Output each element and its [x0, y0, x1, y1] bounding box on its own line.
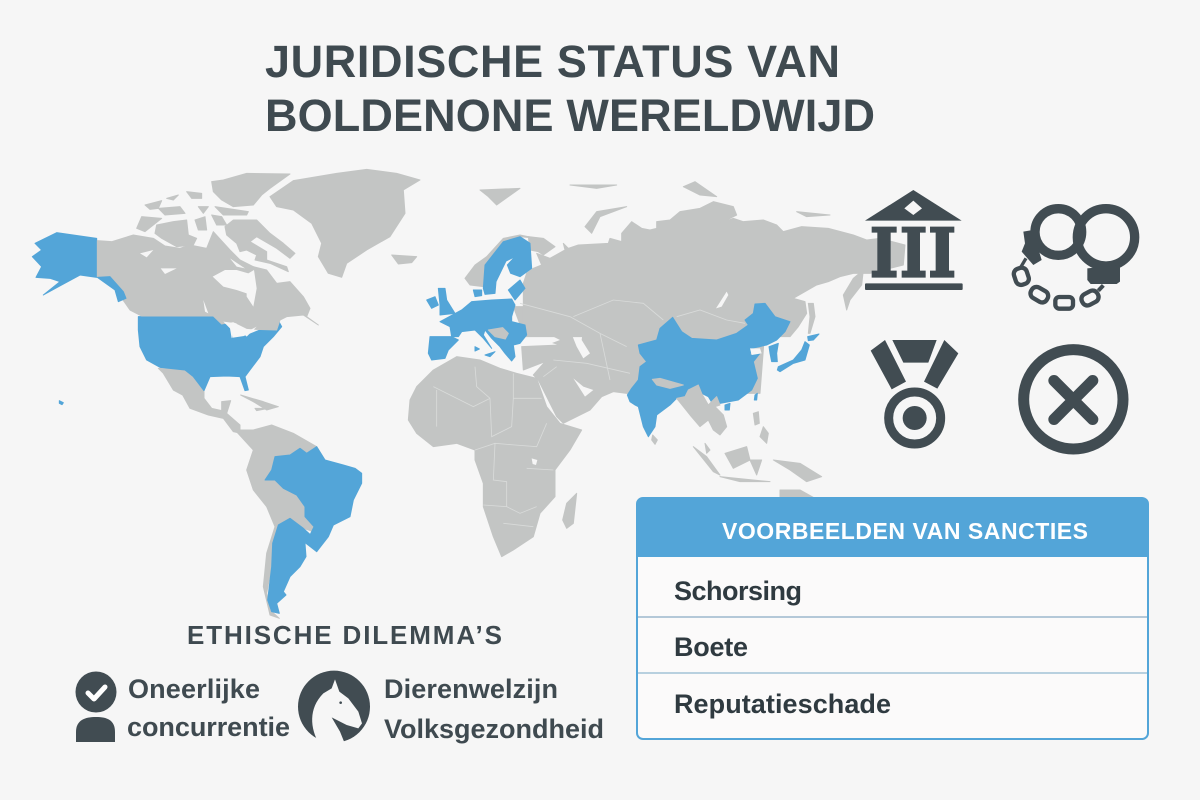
title: [265, 36, 875, 141]
header text: VOORBEELDEN VAN SANCTIES: [722, 518, 1088, 544]
map: Africa and southern Asia: [408, 182, 830, 557]
Southeast Asia: [677, 385, 727, 435]
Indonesia and Philippines: [693, 443, 822, 498]
icon: person with check: [76, 672, 116, 742]
heading: ethische dilemma's: ETHISCHE DILEMMA’S: [187, 620, 502, 650]
Africa: [408, 357, 582, 557]
Iceland: [392, 255, 417, 264]
Argentina: [268, 518, 311, 613]
Madagascar: [563, 493, 577, 528]
map: China, India, Japan: [627, 303, 819, 444]
Brazil: [265, 447, 362, 552]
panel: voorbeelden van sancties: [637, 498, 1148, 739]
UK and Ireland: [427, 288, 455, 315]
Spain and Portugal: [428, 337, 458, 360]
Baltics, Denmark and islands: [473, 280, 525, 357]
title: JURIDISCHE STATUS VAN: [265, 36, 840, 87]
icon: horse: [298, 671, 370, 744]
panel header: [637, 498, 1148, 557]
Norway: [465, 235, 537, 287]
map: Russia: [523, 202, 905, 337]
Bohai Sea: [750, 348, 762, 355]
text: oneerlijke concurrentie: [127, 674, 290, 742]
Kola peninsula: [528, 237, 555, 255]
Lake Baikal: [716, 292, 728, 308]
icon: cross in circle: [1024, 350, 1123, 449]
row: Schorsing: Schorsing: [674, 576, 802, 606]
map: Greenland, Iceland, Latin America, USA: [32, 169, 420, 618]
Himalaya gap: [652, 378, 683, 388]
Greenland: [270, 169, 420, 277]
text: oneerlijke concurrentie: Oneerlijke: [128, 674, 260, 704]
text: oneerlijke concurrentie: concurrentie: [127, 712, 290, 742]
Continental EU: [440, 299, 527, 361]
Arctic islands: [137, 173, 290, 247]
South America: [235, 425, 333, 618]
Hudson Bay and lakes: [140, 250, 257, 338]
Canada mainland: [97, 232, 318, 330]
Baffin Island: [225, 220, 295, 272]
row dividers: [638, 616, 1147, 618]
Sweden and Finland: [483, 237, 532, 294]
text: dierenwelzijn volksgezondheid: Volksgezondheid: [384, 714, 604, 744]
Russia mainland: [523, 202, 905, 337]
row: Boete: Boete: [674, 632, 748, 662]
Black Sea, Caspian, Persian Gulf and Lake Victoria: [523, 327, 593, 465]
Japan: [777, 334, 819, 372]
map: Canada: [97, 173, 318, 338]
panel body: [637, 498, 1148, 739]
Korea: [769, 343, 778, 362]
China and India: [627, 303, 790, 437]
world map: [32, 169, 905, 618]
icon: courthouse: [865, 190, 963, 290]
text: dierenwelzijn volksgezondheid: Dierenwelzijn: [384, 674, 558, 704]
Balkans: [488, 328, 508, 339]
text: dierenwelzijn volksgezondheid: [384, 674, 604, 744]
row: Reputatieschade: Reputatieschade: [674, 689, 891, 719]
title: BOLDENONE WERELDWIJD: [265, 90, 875, 141]
Mexico and Central America: [158, 368, 278, 435]
Hainan and Taiwan: [725, 393, 757, 410]
Kamchatka: [843, 270, 863, 310]
Hawaii: [59, 401, 63, 405]
Svalbard and Arctic islands: [480, 182, 830, 217]
Alaska: [32, 233, 97, 295]
icon: handcuffs: [1012, 209, 1135, 309]
USA: [138, 317, 282, 391]
icon: medal: [871, 340, 958, 444]
map: country borders: [433, 300, 745, 527]
Middle East and Central Asia: [513, 307, 767, 423]
Novaya Zemlya: [585, 207, 627, 233]
map: Europe: [427, 235, 537, 361]
Alaska panhandle: [97, 277, 126, 302]
Sakhalin, Sri Lanka, Philippines: [652, 303, 815, 444]
